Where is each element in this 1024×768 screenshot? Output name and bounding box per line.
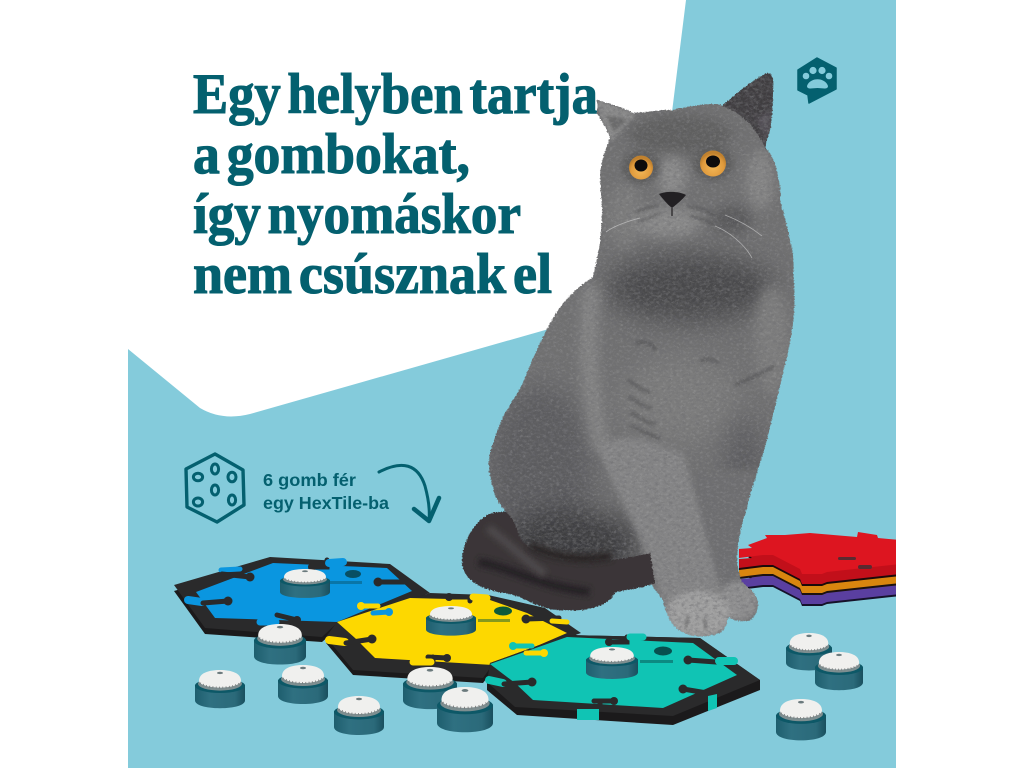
title: [193, 63, 598, 306]
title: így nyomáskor: [193, 183, 521, 246]
teal hex tile: [487, 635, 760, 725]
icon: hex tile with six button holes: [186, 454, 244, 522]
muzzle lines: [636, 206, 716, 224]
loose button 6: [437, 687, 493, 732]
loose button 3: [278, 665, 328, 704]
brand mark on red tile: [838, 557, 856, 560]
whiskers: [606, 215, 762, 258]
brand logo: [328, 570, 362, 584]
red puzzle tile stack: [739, 532, 900, 606]
muzzle line: [671, 208, 673, 216]
loose button 7: [786, 633, 832, 670]
brand logo: [478, 606, 512, 622]
cat: [462, 60, 810, 650]
button on blue tile: [280, 569, 330, 598]
loose button 1: [254, 624, 306, 665]
loose button 8: [815, 652, 863, 690]
blue hex tile: [174, 557, 430, 642]
body shading: [605, 254, 775, 322]
fur stripes: [627, 342, 775, 438]
yellow hex tile: [326, 593, 581, 683]
title: nem csúsznak el: [193, 243, 552, 306]
right ear: [722, 72, 775, 150]
puzzle joins: [188, 560, 410, 622]
caption: 6 buttons fit one HexTile: egy HexTile-ba: [263, 493, 389, 513]
nose: [659, 192, 686, 208]
second front leg: [723, 470, 758, 621]
arrow pointing to tiles: [379, 465, 439, 521]
tail: [462, 512, 655, 610]
white headline panel: [128, 0, 686, 416]
eye right: [700, 150, 726, 176]
button on teal tile: [586, 647, 638, 679]
caption: 6 buttons fit one HexTile: 6 gomb fér: [263, 470, 356, 490]
loose button 4: [334, 696, 384, 735]
loose button 9: [776, 699, 826, 740]
loose button 5: [403, 667, 457, 709]
puzzle joins: [489, 637, 734, 707]
caption: 6 buttons fit one HexTile: [263, 470, 389, 513]
near front leg: [597, 438, 730, 640]
fur grain: [488, 74, 795, 636]
button on yellow tile: [426, 606, 476, 636]
title: Egy helyben tartja: [193, 63, 598, 126]
brand logo: [640, 646, 673, 663]
paws: [718, 581, 758, 621]
icon: brand paw logo: [798, 58, 836, 103]
title: a gombokat,: [193, 123, 470, 186]
eye left: [629, 156, 653, 180]
cat body and head: [488, 72, 796, 638]
loose button 2: [195, 670, 245, 708]
puzzle joins: [329, 597, 567, 664]
background panel: [128, 0, 896, 768]
face shading: [628, 115, 732, 155]
left ear: [597, 100, 636, 142]
